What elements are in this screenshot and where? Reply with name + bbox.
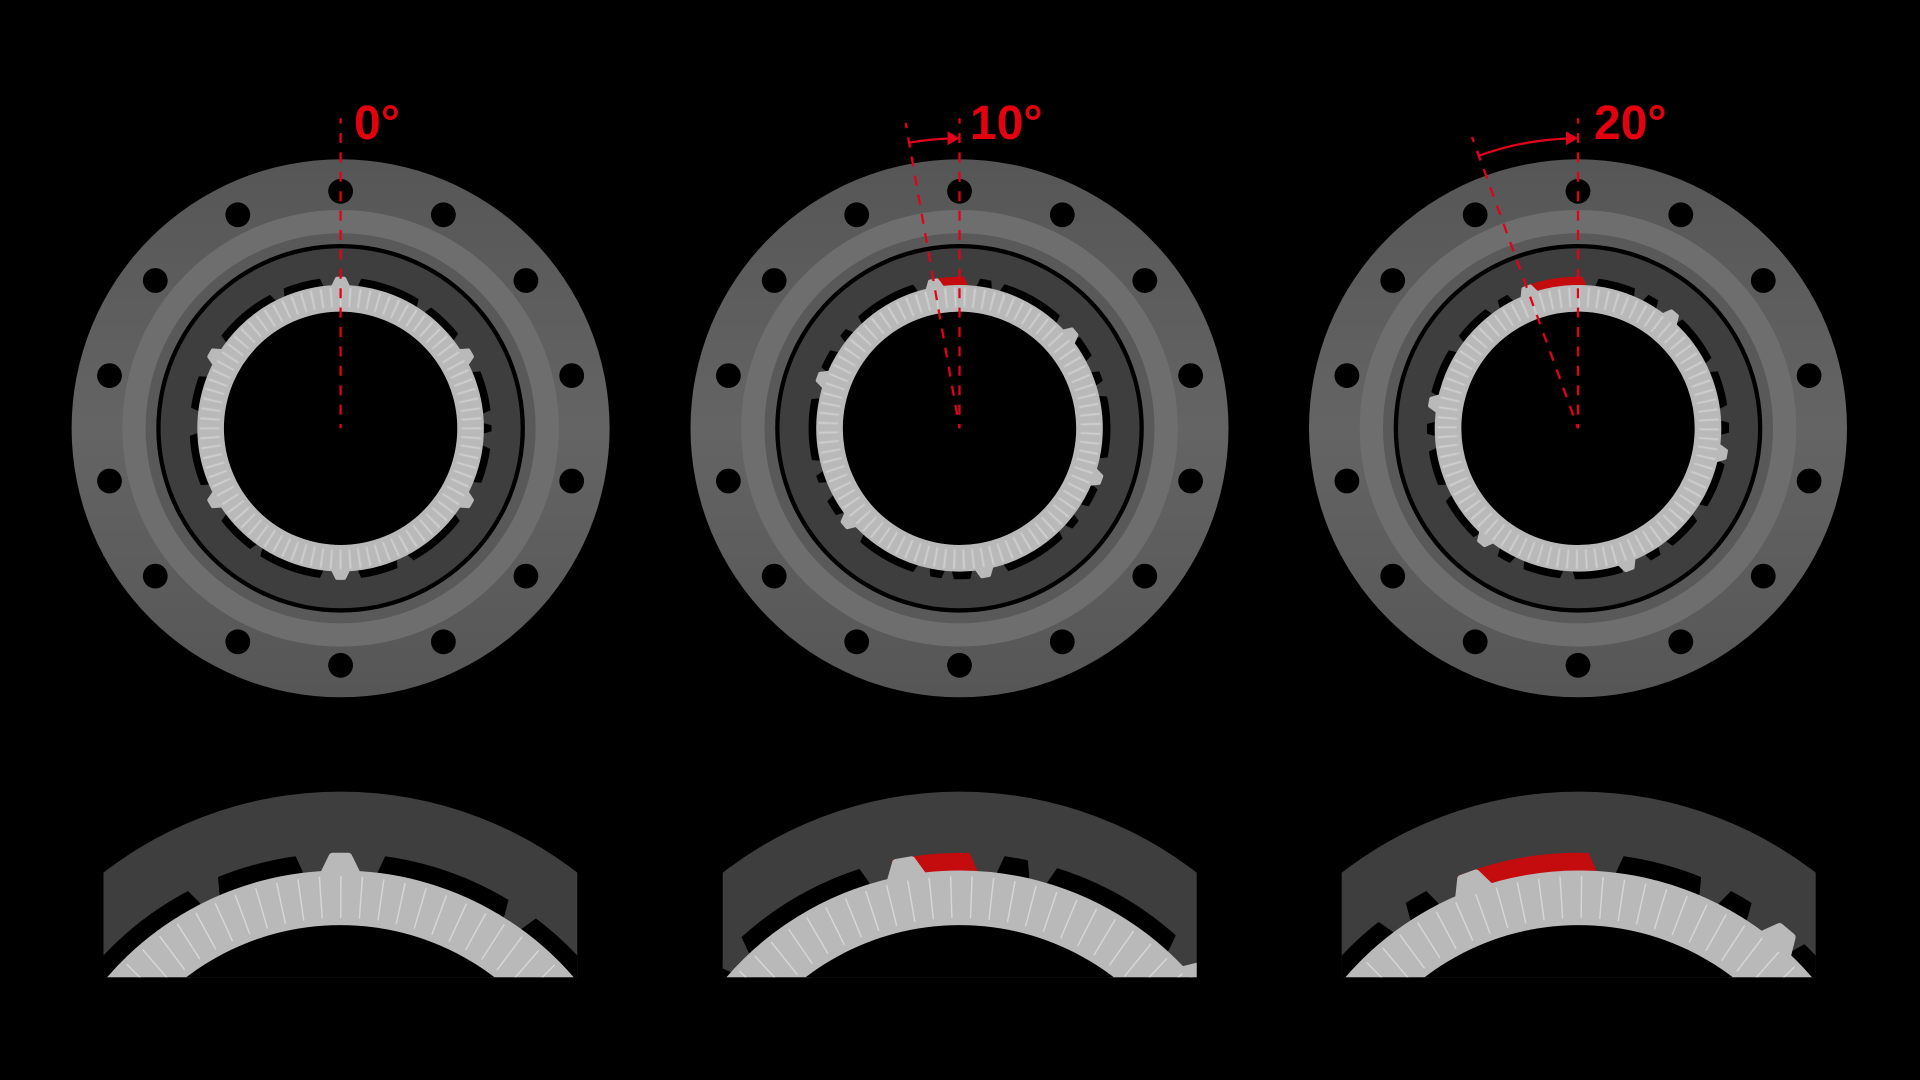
toothed ring rotated 20 degrees	[1398, 239, 1758, 617]
panel: gear at 0 degrees	[72, 118, 610, 697]
black tooth slots	[1426, 277, 1730, 580]
detail view: 0 degrees	[104, 792, 578, 978]
detail view: 10 degrees	[722, 792, 1197, 978]
rotated dashed line	[906, 123, 960, 428]
red swept area	[1521, 277, 1587, 298]
toothed ring rotated 10 degrees	[799, 255, 1120, 601]
reference dashed line	[1577, 118, 1579, 428]
reference dashed line	[339, 118, 342, 428]
label: 0 degrees: 0°	[354, 97, 400, 150]
reference dashed line	[958, 118, 961, 428]
panel: gear at 10 degrees	[690, 118, 1228, 697]
black tooth slots	[189, 277, 493, 579]
toothed ring at 0 degrees	[205, 277, 477, 580]
angle arrow	[1477, 131, 1578, 160]
red swept area	[926, 277, 968, 290]
detail view: 20 degrees	[1342, 792, 1816, 978]
label: 10 degrees: 10°	[970, 97, 1043, 150]
hub housing with bolt holes	[1309, 159, 1847, 697]
hub housing with bolt holes	[72, 159, 610, 697]
panel: gear at 20 degrees	[1309, 118, 1847, 697]
black tooth slots	[810, 277, 1109, 580]
rotated dashed line	[1472, 137, 1578, 428]
hub housing with bolt holes	[690, 159, 1228, 697]
angle arrow	[908, 131, 960, 148]
label: 20 degrees: 20°	[1594, 97, 1667, 150]
